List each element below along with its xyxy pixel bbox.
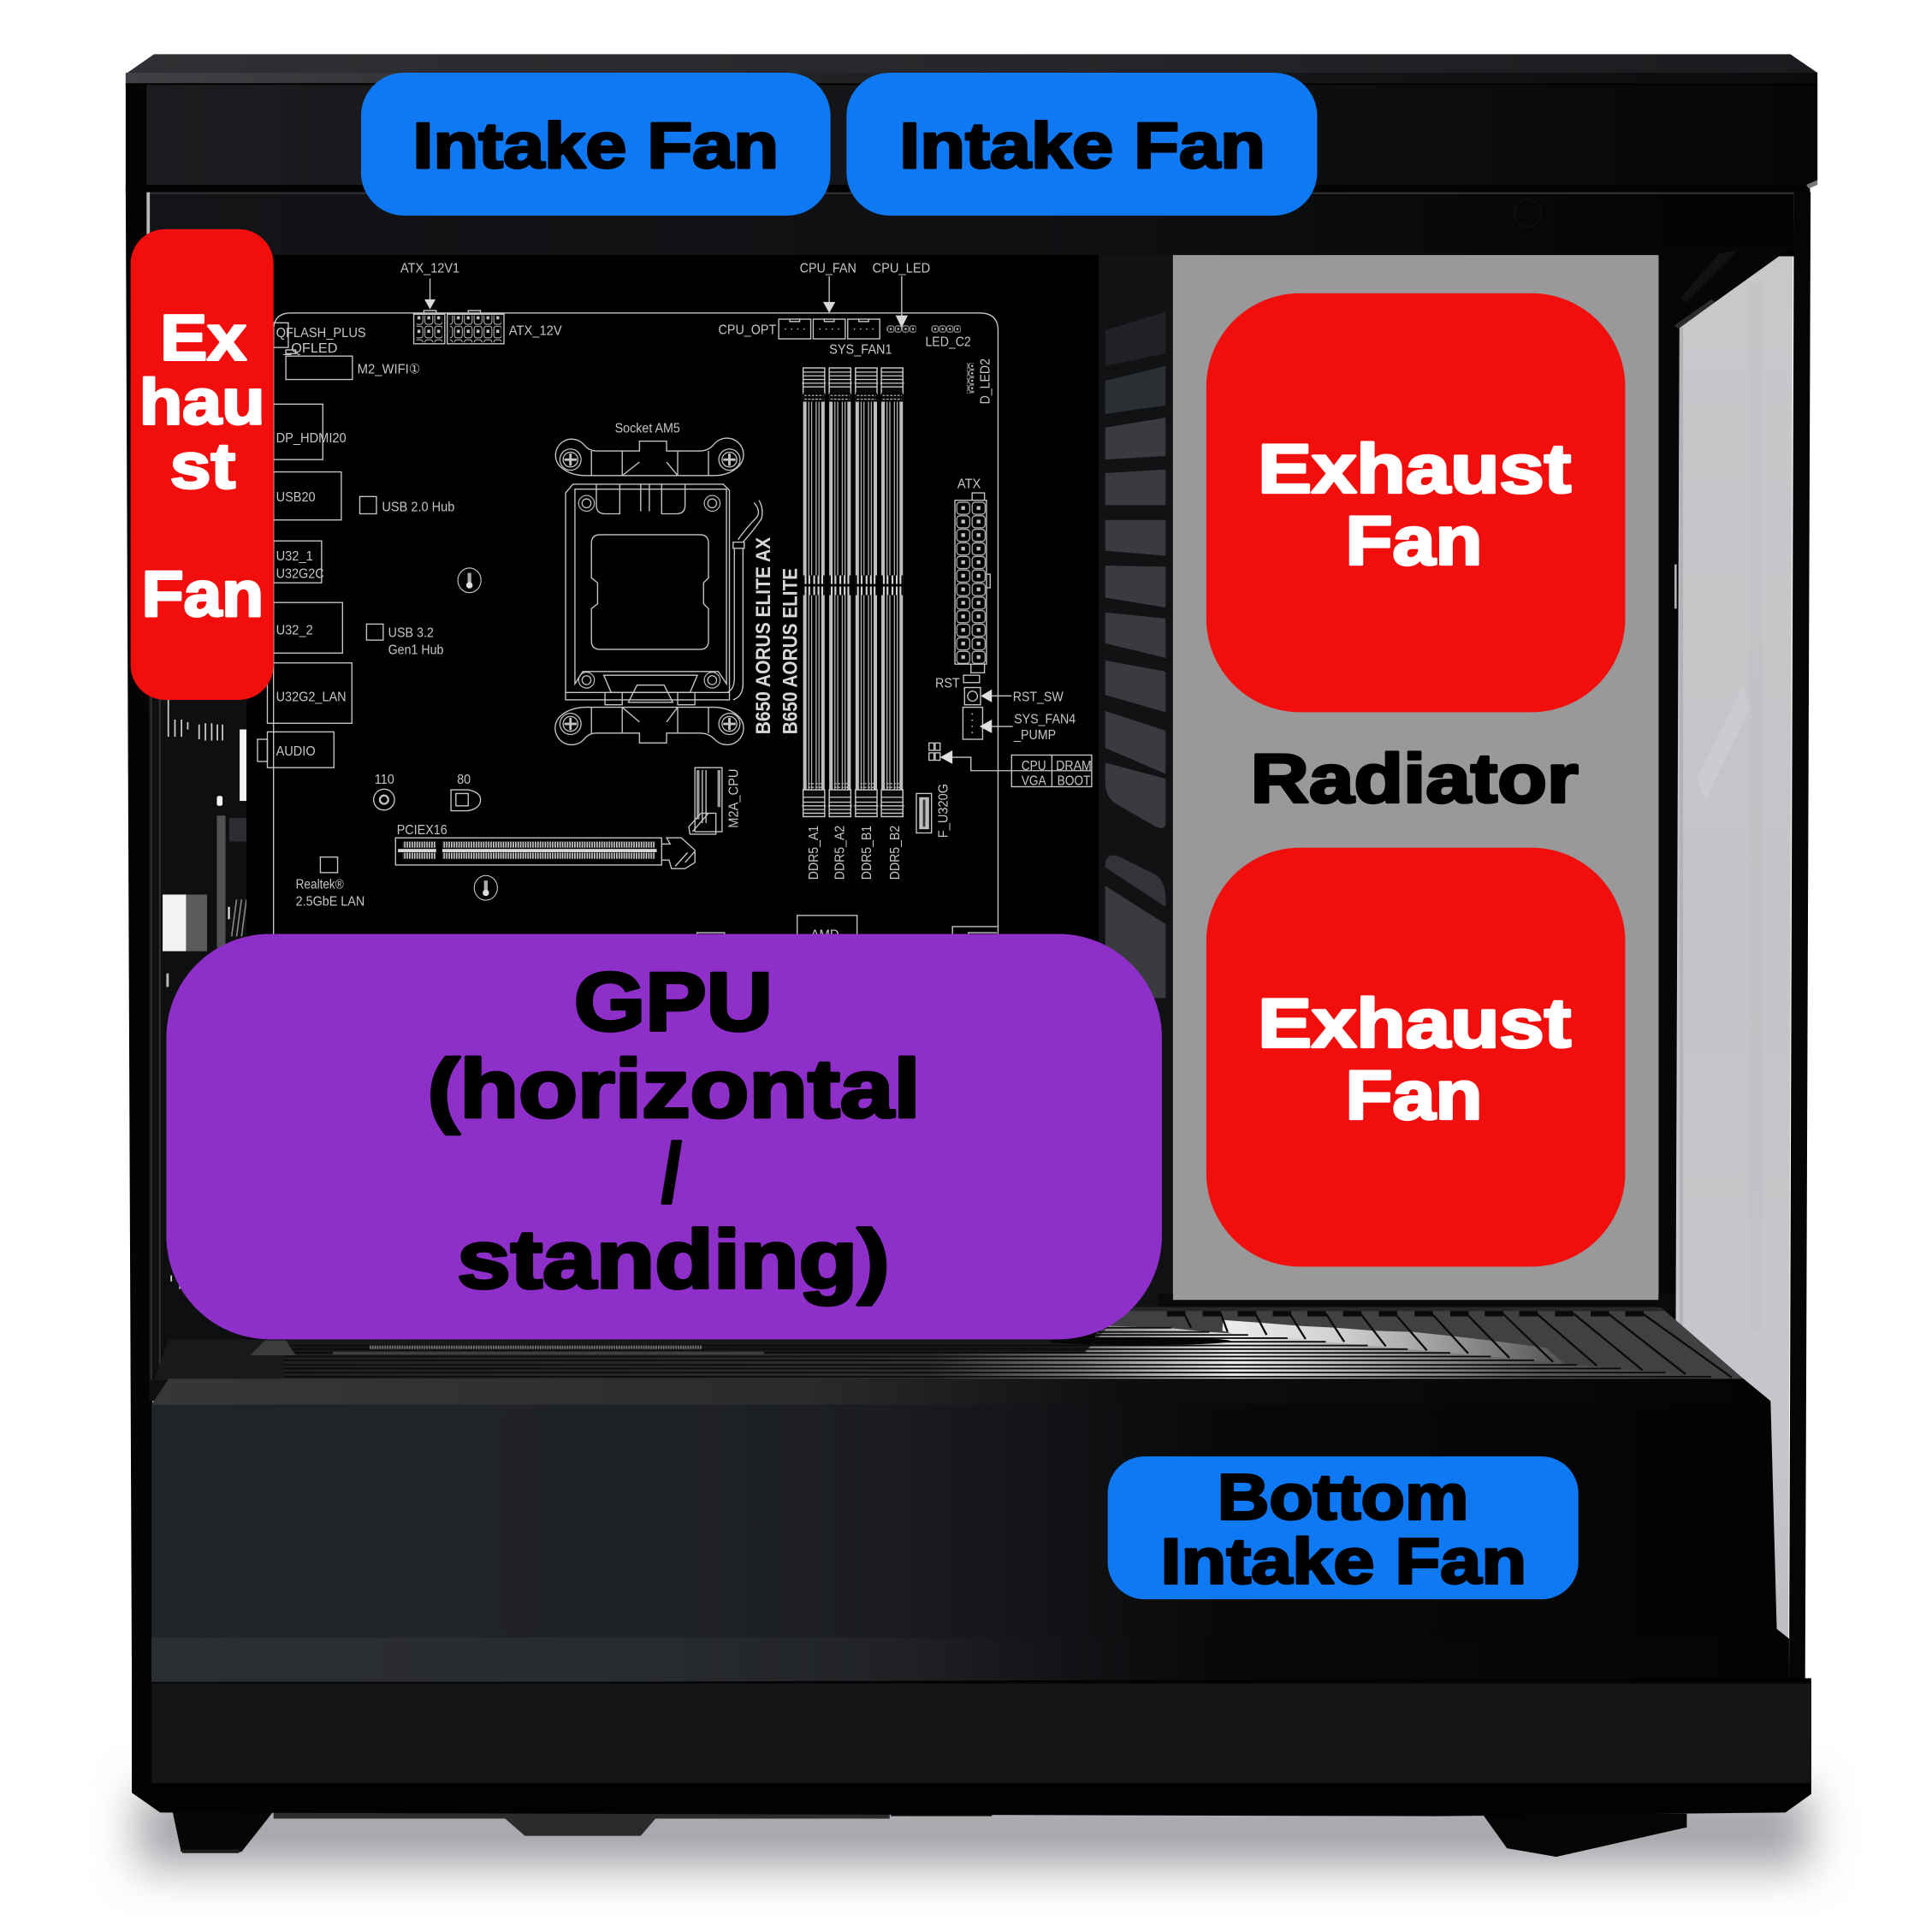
- label: intake fan 2: Intake Fan: [899, 110, 1265, 181]
- label: GPU: (horizontal: [428, 1043, 921, 1135]
- reset and pump headers: RST: [935, 677, 960, 691]
- ATX 12V connectors: [414, 278, 504, 344]
- PSU shroud: [151, 1378, 1789, 1683]
- DDR5 memory slots: DDR5_B1: [860, 826, 874, 880]
- debug LED table: VGA: [1022, 773, 1046, 788]
- floor shadow: [138, 1789, 1809, 1868]
- label: rear exhaust fan: [131, 229, 274, 700]
- vent slots: [169, 700, 222, 740]
- DDR5 memory slots: [802, 368, 904, 880]
- ribbed PSU shroud vent: [154, 1307, 1744, 1380]
- top connector labels: [400, 261, 993, 404]
- glass side panel: [1675, 246, 1793, 1641]
- PC case frame: [126, 54, 1817, 1688]
- motherboard diagram panel: [246, 255, 1099, 1352]
- label: radiator exhaust fan bottom: Fan: [1346, 1058, 1482, 1135]
- rear I/O labels and blocks: U32_2: [276, 624, 313, 638]
- front USB header: [916, 784, 951, 838]
- label: GPU: /: [661, 1128, 681, 1219]
- board model names: B650 AORUS ELITE: [779, 568, 803, 734]
- label: rear exhaust fan: Ex: [160, 301, 246, 373]
- rear I/O labels and blocks: M2_WIFI①: [358, 362, 420, 376]
- debug LED table: BOOT: [1058, 773, 1091, 788]
- rear I/O labels and blocks: Realtek®: [296, 877, 344, 892]
- rear I/O labels and blocks: DP_HDMI20: [276, 431, 347, 446]
- ribs and tabs: [1167, 1311, 1644, 1317]
- label: intake fan 1: Intake Fan: [412, 110, 779, 181]
- board model names: [752, 536, 803, 734]
- radiator panel: [1159, 255, 1675, 1311]
- label: bottom intake fan: [1108, 1456, 1579, 1599]
- rear I/O labels and blocks: USB20: [276, 490, 316, 505]
- CPU socket AM5: [458, 421, 762, 744]
- debug LED table: CPU: [1022, 759, 1046, 773]
- sensors: 80: [457, 773, 471, 787]
- board model names: B650 AORUS ELITE AX: [752, 536, 775, 734]
- top connector labels: LED_C2: [925, 335, 971, 350]
- reset and pump headers: SYS_FAN4: [1014, 712, 1076, 726]
- rear I/O labels and blocks: U32G2_LAN: [276, 690, 347, 704]
- label: radiator exhaust fan bottom: [1206, 848, 1625, 1266]
- top fan panel: [126, 84, 1817, 195]
- label: radiator exhaust fan top: Exhaust: [1258, 430, 1571, 507]
- top connector labels: CPU_FAN: [800, 261, 856, 276]
- case top chamfer: [126, 54, 1817, 86]
- label: intake fan 1: [361, 73, 831, 216]
- M.2 slot: M2A_CPU: [727, 769, 742, 828]
- top connector labels: ATX_12V1: [400, 261, 459, 276]
- clipped chips behind GPU: AMD: [811, 927, 839, 942]
- top connector labels: SYS_FAN1: [829, 342, 892, 357]
- radiator label: Radiator: [1251, 740, 1579, 817]
- rear I/O labels and blocks: USB 3.2: [388, 626, 434, 641]
- reset and pump headers: [929, 675, 1076, 771]
- GPU bracket details: [250, 1341, 764, 1355]
- rear I/O labels and blocks: 2.5GbE LAN: [296, 894, 364, 909]
- right pillar: [1789, 193, 1811, 1688]
- horizontal fins: [283, 1328, 1711, 1377]
- label: GPU: [166, 934, 1162, 1339]
- top connector labels: CPU_LED: [873, 261, 930, 276]
- white bracket: [163, 894, 186, 951]
- rear I/O labels and blocks: AUDIO: [276, 744, 316, 759]
- top interior strip: [146, 193, 1794, 257]
- reset and pump headers: _PUMP: [1013, 728, 1056, 743]
- top connector labels: D_LED2: [978, 359, 993, 404]
- left pillar: [126, 185, 154, 1688]
- PCIe x16 slot: PCIEX16: [397, 823, 447, 838]
- label: radiator exhaust fan top: Fan: [1346, 503, 1482, 580]
- clipped chips behind GPU: [697, 916, 998, 942]
- rear I/O labels and blocks: QFLASH_PLUS: [276, 326, 366, 341]
- sensors: [374, 773, 497, 900]
- label: rear exhaust fan: Fan: [142, 558, 264, 630]
- board outline: [274, 313, 998, 936]
- rear I/O labels and blocks: _QFLED: [282, 341, 338, 356]
- rear I/O labels and blocks: U32G2C: [276, 566, 324, 581]
- rear I/O labels and blocks: USB 2.0 Hub: [382, 501, 455, 515]
- case base and feet: [132, 1678, 1811, 1857]
- PCIe x16 slot: [395, 823, 695, 868]
- debug LED table: DRAM: [1056, 759, 1092, 773]
- label: rear exhaust fan: hau: [139, 365, 265, 437]
- top connector labels: ATX_12V: [509, 324, 562, 339]
- reset and pump headers: RST_SW: [1013, 690, 1064, 704]
- front USB header: F_U320G: [936, 784, 951, 838]
- horizontal fin zone: [283, 1325, 1711, 1378]
- M.2 slot: [689, 767, 742, 834]
- label: radiator exhaust fan bottom: Exhaust: [1258, 985, 1571, 1062]
- front vent column: [1099, 255, 1173, 1315]
- sensors: 110: [375, 773, 394, 787]
- label: GPU: GPU: [574, 957, 773, 1048]
- label: GPU: standing): [457, 1214, 890, 1306]
- CPU socket AM5: Socket AM5: [615, 421, 680, 436]
- dark reflection: [1048, 1337, 1231, 1345]
- label: radiator exhaust fan top: [1206, 293, 1625, 712]
- DDR5 memory slots: DDR5_A2: [833, 826, 847, 880]
- ATX power connector: ATX: [957, 477, 981, 491]
- rear I/O labels and blocks: U32_1: [276, 549, 313, 564]
- label: bottom intake fan: Intake Fan: [1161, 1525, 1526, 1597]
- rear I/O labels and blocks: [258, 323, 455, 909]
- top connector labels: CPU_OPT: [719, 323, 777, 337]
- label: rear exhaust fan: st: [170, 430, 235, 501]
- ATX power connector: [955, 477, 990, 673]
- fan headers: [779, 276, 975, 394]
- rear I/O labels and blocks: Gen1 Hub: [388, 643, 444, 658]
- DDR5 memory slots: DDR5_B2: [888, 826, 903, 880]
- label: intake fan 2: [846, 73, 1317, 216]
- left interior rear I/O area: [149, 255, 247, 1401]
- highlight: [1223, 1320, 1565, 1364]
- debug LED table: [1011, 755, 1092, 788]
- DDR5 memory slots: DDR5_A1: [807, 826, 821, 880]
- label: bottom intake fan: Bottom: [1218, 1461, 1469, 1533]
